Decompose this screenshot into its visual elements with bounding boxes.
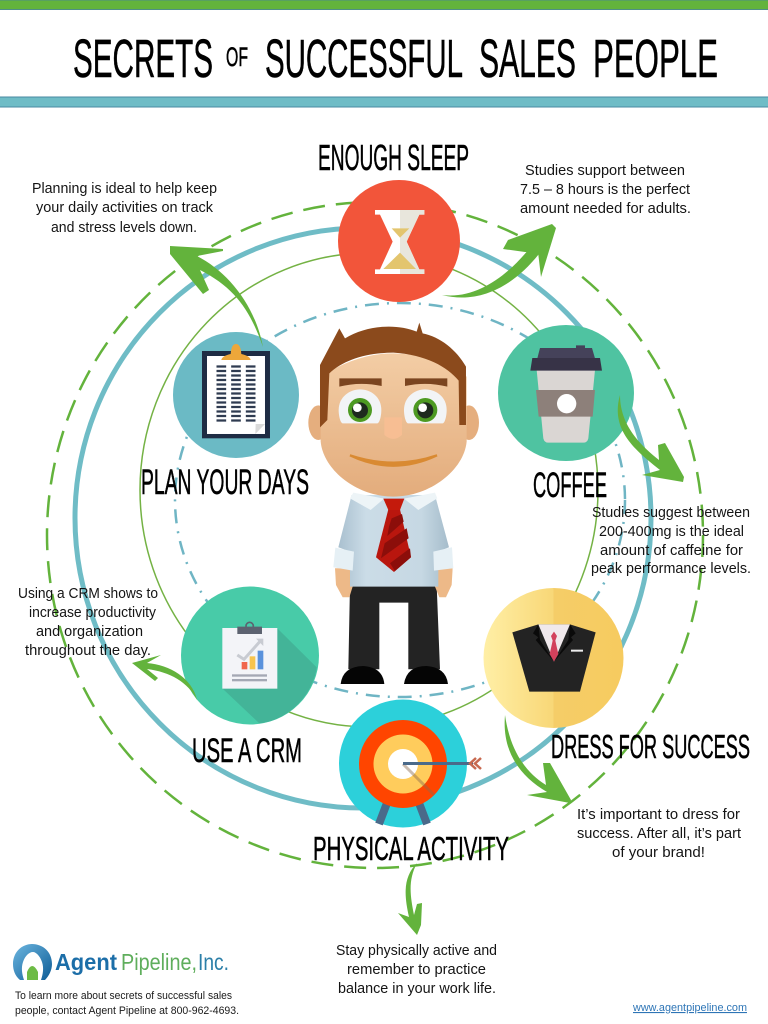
top green bar xyxy=(0,0,768,10)
text: dress note: of your brand! xyxy=(612,845,705,861)
text: crm note xyxy=(18,586,158,659)
text: dress note xyxy=(577,807,741,861)
icon: hourglass on red circle (enough sleep) xyxy=(338,180,460,302)
text: coffee note: 200-400mg is the ideal xyxy=(599,524,744,540)
text: crm note: and organization xyxy=(36,624,143,640)
footer contact text: people, contact Agent Pipeline at 800-962-4693. xyxy=(15,1005,239,1017)
ears xyxy=(308,405,479,440)
text: sleep note: amount needed for adults. xyxy=(520,201,691,217)
logo: Agent Pipeline xyxy=(13,944,229,980)
eyes xyxy=(339,389,447,423)
text: dress note: success. After all, it’s part xyxy=(577,826,741,842)
text: sleep note xyxy=(520,163,691,217)
label: coffee: COFFEE xyxy=(533,466,607,505)
red tie xyxy=(376,499,411,572)
label: plan your days: PLAN YOUR DAYS xyxy=(141,463,309,502)
logo: Agent Pipeline: Agent xyxy=(55,949,117,975)
arrow: dress to dress note xyxy=(505,715,571,803)
arrow: sleep to sleep note xyxy=(442,224,556,298)
text: plan note: and stress levels down. xyxy=(51,220,197,236)
icon: CRM report clipboard on green circle xyxy=(181,586,319,724)
character: salesman xyxy=(308,323,479,684)
text: plan note: your daily activities on track xyxy=(36,200,214,216)
nose xyxy=(384,417,402,439)
footer contact text xyxy=(15,990,239,1017)
text: dress note: It’s important to dress for xyxy=(577,807,740,823)
arrow: plan to plan note xyxy=(170,246,263,347)
teal header bar xyxy=(0,97,768,107)
text: activity note: remember to practice xyxy=(347,962,486,978)
logo: Agent Pipeline: Inc. xyxy=(198,949,229,975)
text: plan note: Planning is ideal to help keep xyxy=(32,181,217,197)
arrow: coffee to coffee note xyxy=(618,395,684,482)
arrow: CRM to CRM note xyxy=(132,655,197,700)
text: crm note: increase productivity xyxy=(29,605,157,621)
mouth xyxy=(350,455,437,466)
arrow: activity to activity note xyxy=(398,863,422,935)
orbit rings xyxy=(47,202,703,868)
title: SALES xyxy=(479,29,576,89)
text: activity note xyxy=(336,943,497,997)
text: plan note xyxy=(32,181,217,236)
text: sleep note: 7.5 – 8 hours is the perfect xyxy=(520,182,690,198)
collar xyxy=(350,493,437,510)
title xyxy=(73,29,718,89)
text: coffee note xyxy=(591,505,751,577)
text: crm note: throughout the day. xyxy=(25,643,151,659)
shirt xyxy=(338,495,449,587)
text: coffee note: peak performance levels. xyxy=(591,561,751,577)
text: sleep note: Studies support between xyxy=(525,163,685,179)
icon: clipboard on teal circle (plan your days) xyxy=(173,332,299,458)
logo: Agent Pipeline: Pipeline, xyxy=(121,949,197,975)
shirt cuffs xyxy=(333,547,453,571)
footer contact text: To learn more about secrets of successful sales xyxy=(15,990,232,1002)
label: use a crm: USE A CRM xyxy=(192,732,302,770)
footer website link: www.agentpipeline.com xyxy=(632,1002,747,1014)
label: physical activity: PHYSICAL ACTIVITY xyxy=(313,830,509,867)
label: enough sleep: ENOUGH SLEEP xyxy=(318,137,469,178)
hair xyxy=(320,323,466,427)
icon: target on cyan circle (physical activity) xyxy=(339,700,481,828)
icon: suit on yellow circle (dress for success) xyxy=(484,588,624,728)
icon: coffee cup on green circle xyxy=(498,325,634,461)
text: activity note: balance in your work life. xyxy=(338,981,496,997)
trousers and shoes xyxy=(341,585,448,684)
title: SUCCESSFUL xyxy=(265,29,463,89)
title: OF xyxy=(226,42,248,72)
text: activity note: Stay physically active and xyxy=(336,943,497,959)
title: SECRETS xyxy=(73,29,213,89)
text: coffee note: Studies suggest between xyxy=(592,505,750,521)
text: crm note: Using a CRM shows to xyxy=(18,586,158,602)
face xyxy=(321,353,467,497)
hands xyxy=(335,568,453,597)
eyebrows xyxy=(339,378,447,387)
text: coffee note: amount of caffeine for xyxy=(600,543,743,559)
